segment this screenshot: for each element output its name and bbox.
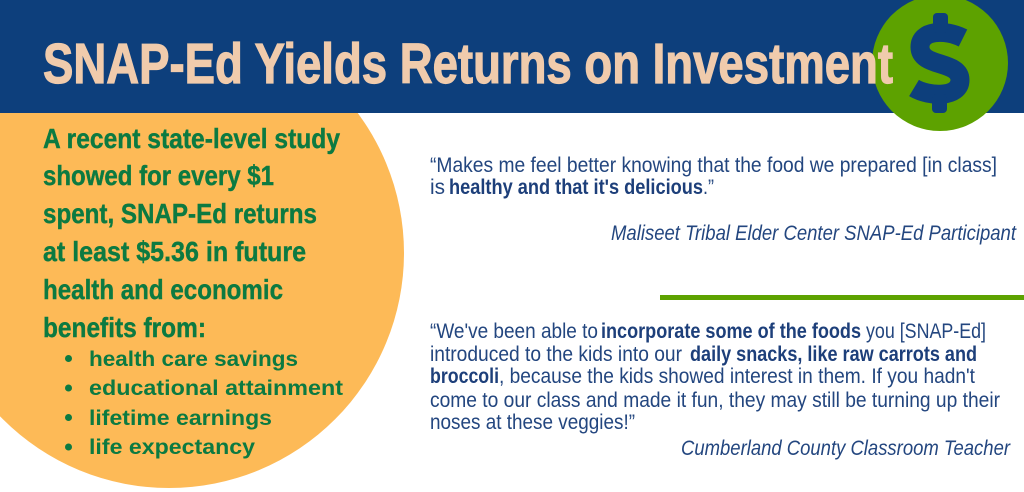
divider <box>660 295 1024 300</box>
study summary text: benefits from: <box>43 312 206 343</box>
quote: classroom teacher: daily snacks, like raw carrots and <box>690 343 977 366</box>
study summary text <box>43 123 340 343</box>
study summary text: health and economic <box>43 274 283 305</box>
quote: classroom teacher <box>430 320 1000 434</box>
header band <box>0 0 1024 113</box>
quote: classroom teacher: broccoli <box>430 365 499 388</box>
orange circle panel <box>0 18 404 488</box>
study summary text: at least $5.36 in future <box>43 236 306 267</box>
icon: green dollar coin <box>872 0 1008 131</box>
quote: classroom teacher: you [SNAP-Ed] <box>866 320 986 343</box>
quote: Maliseet participant <box>430 154 997 199</box>
quote: Maliseet participant: .” <box>703 176 714 199</box>
benefits list: health care savings <box>89 348 298 371</box>
quote: Maliseet participant: healthy and that it's delicious <box>449 176 703 199</box>
quote: classroom teacher: “We've been able to <box>430 320 598 343</box>
quote: Maliseet participant: is <box>430 176 445 199</box>
study summary text: spent, SNAP-Ed returns <box>43 198 317 229</box>
quote: classroom teacher: introduced to the kids into our <box>430 343 682 366</box>
quote: classroom teacher: noses at these veggies!” <box>430 411 635 434</box>
quote: classroom teacher: incorporate some of the foods <box>601 320 861 343</box>
study summary text: A recent state-level study <box>43 123 340 154</box>
quote: classroom teacher: , because the kids showed interest in them. If you hadn't <box>499 365 975 388</box>
study summary text: showed for every $1 <box>43 160 274 191</box>
benefits list: lifetime earnings <box>89 407 272 430</box>
benefits list: educational attainment <box>89 377 343 400</box>
benefits list: life expectancy <box>89 436 255 459</box>
benefits list <box>65 348 343 459</box>
